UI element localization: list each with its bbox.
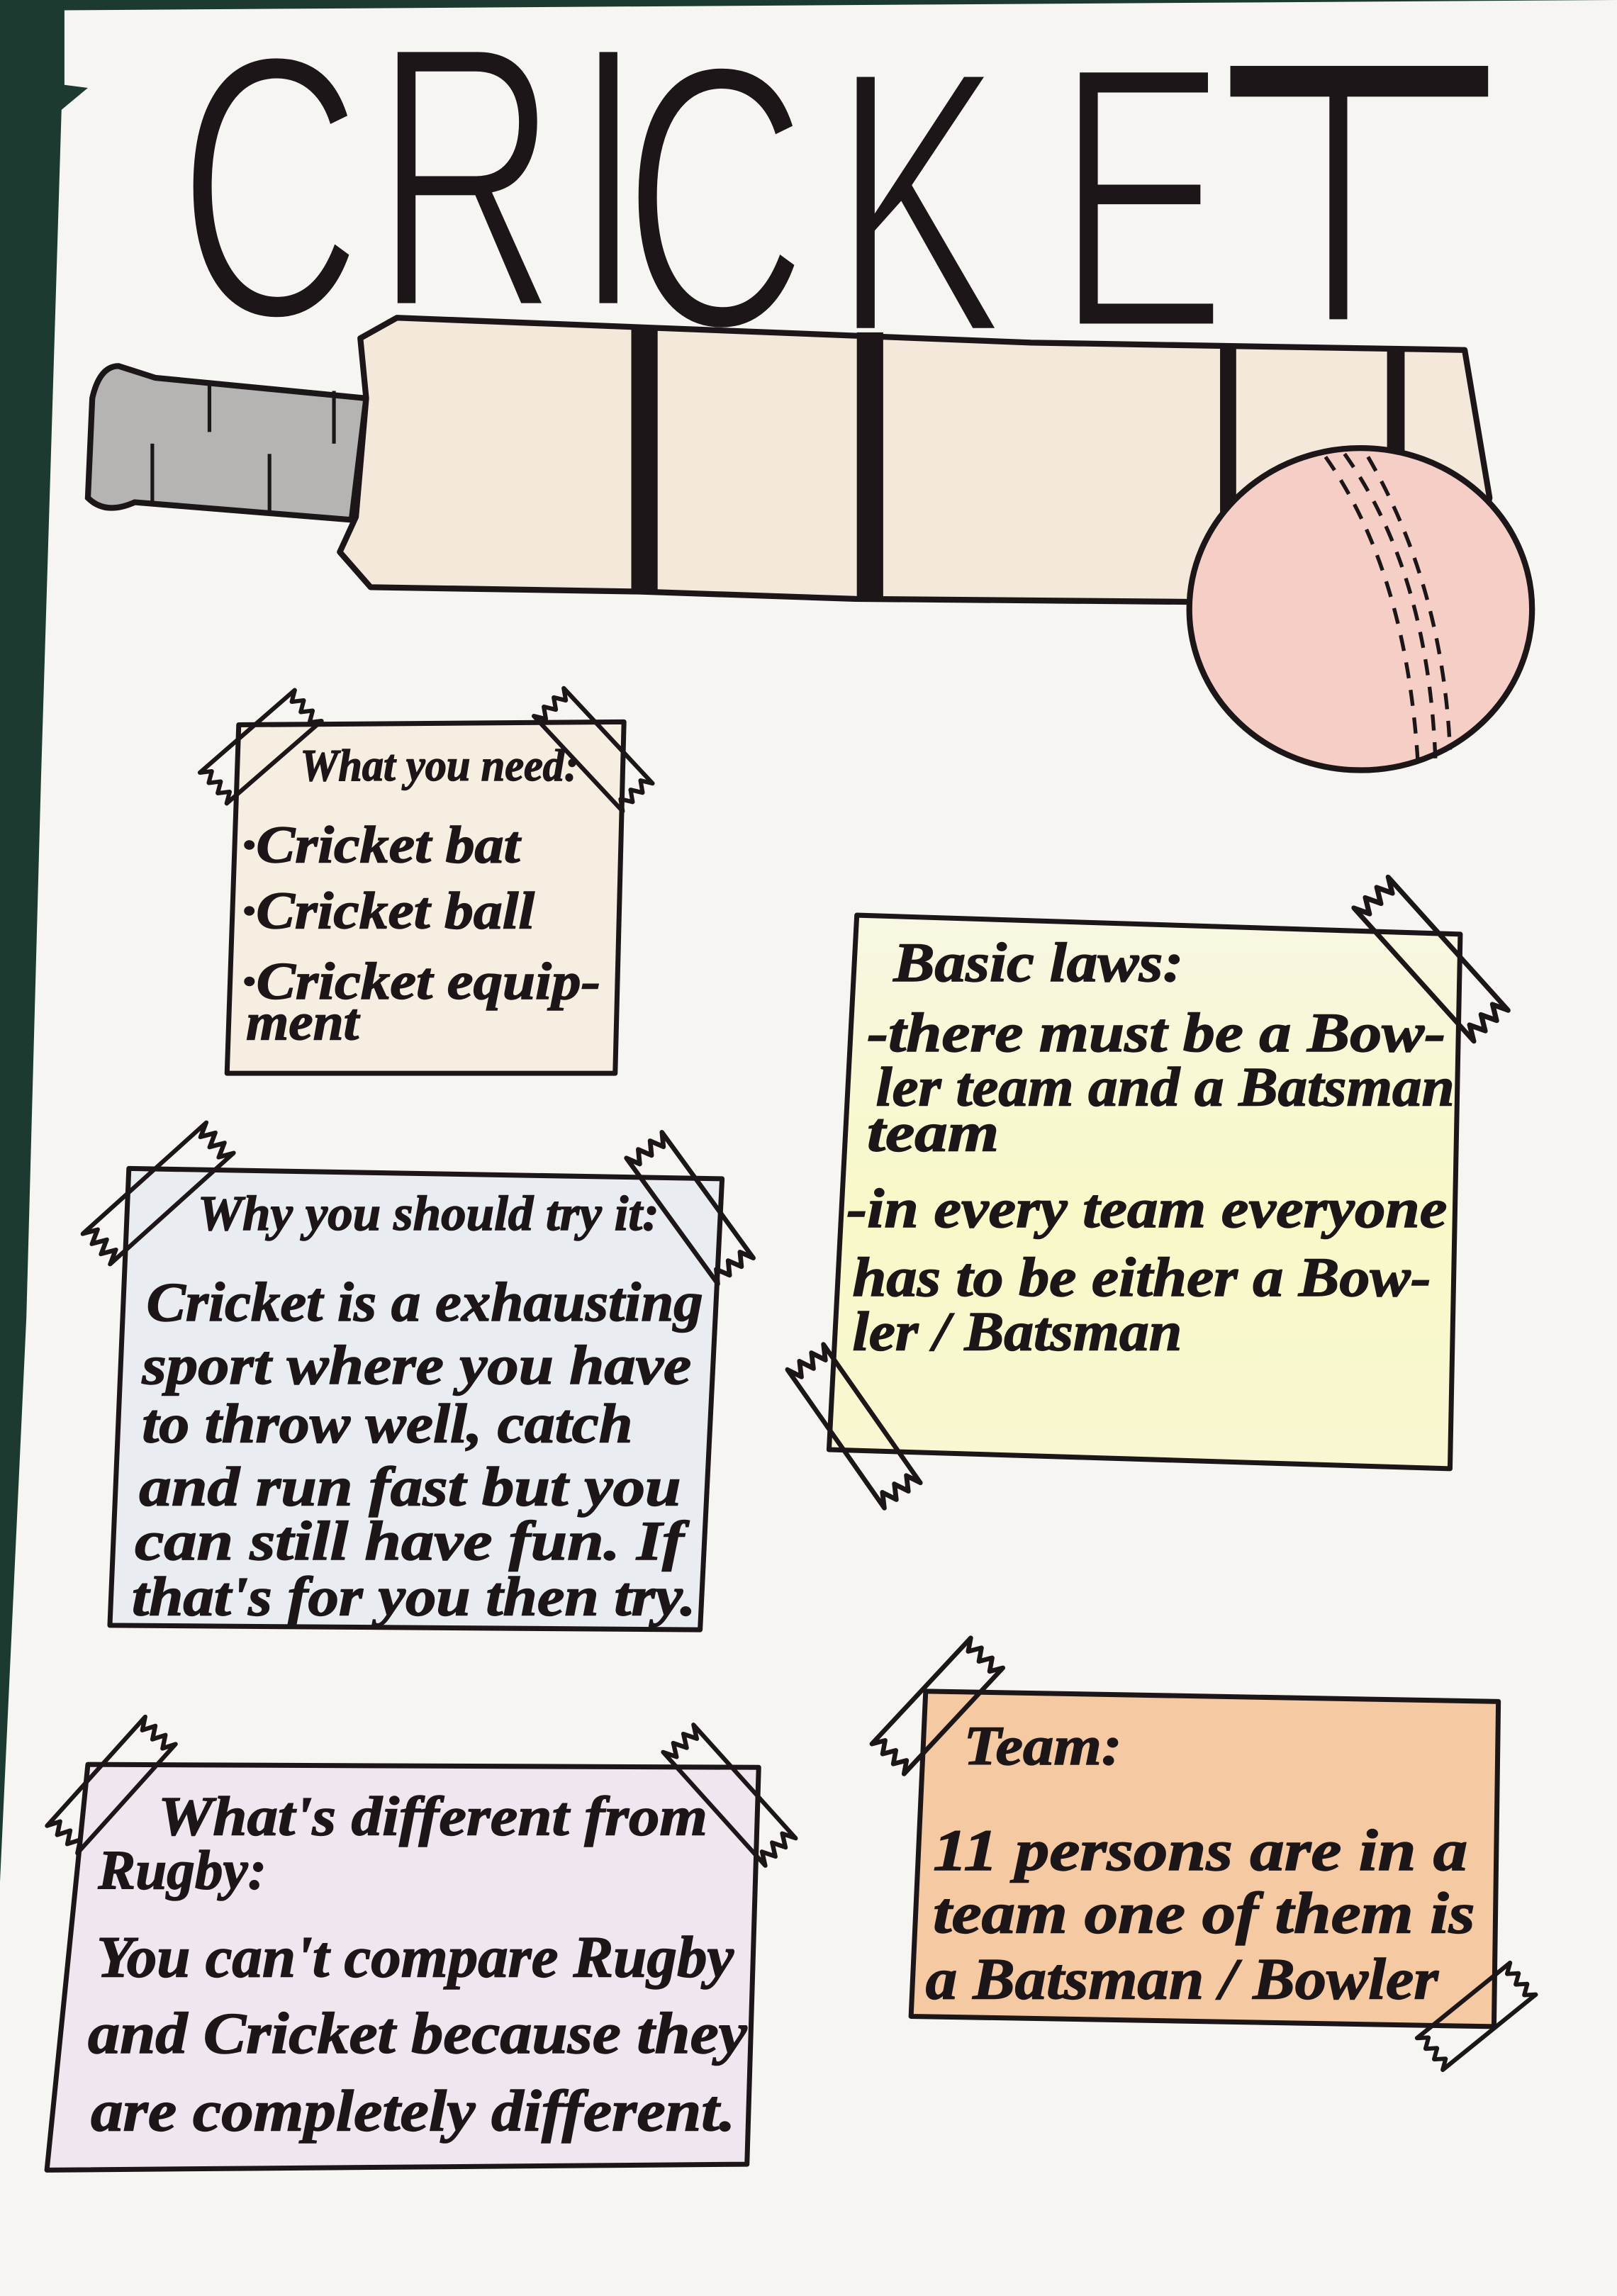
body text: has to be either a Bow-	[852, 1246, 1431, 1308]
body text: ler team and a Batsman	[876, 1056, 1455, 1118]
body text: Cricket is a exhausting	[147, 1271, 703, 1333]
body text	[846, 1002, 1455, 1362]
heading: Team:	[964, 1715, 1122, 1776]
list: ·Cricket equip-	[242, 953, 600, 1011]
tape	[83, 1123, 233, 1264]
tape	[1417, 1963, 1536, 2070]
body text: a Batsman / Bowler	[926, 1947, 1439, 2012]
body text: that's for you then try.	[132, 1565, 695, 1627]
body text: sport where you have	[141, 1334, 691, 1396]
tape	[788, 1345, 920, 1508]
heading	[97, 1785, 707, 1901]
heading: What you need:	[301, 740, 578, 790]
body text: team	[867, 1102, 999, 1163]
body text: ler / Batsman	[852, 1301, 1182, 1362]
body text: 11 persons are in a	[933, 1818, 1467, 1883]
panel: why you should try it	[83, 1123, 754, 1630]
body text: -there must be a Bow-	[867, 1002, 1445, 1063]
body text	[926, 1818, 1475, 2012]
icon: cricket bat	[88, 318, 1489, 602]
list: ·Cricket ball	[242, 883, 535, 941]
bat handle	[88, 366, 367, 520]
panel: different from rugby	[47, 1717, 795, 2170]
list: ment	[246, 994, 361, 1052]
tape	[872, 1638, 1003, 1774]
body text: to throw well, catch	[142, 1393, 633, 1455]
list	[242, 817, 600, 1052]
tape	[627, 1132, 754, 1284]
body text: can still have fun. If	[135, 1510, 690, 1572]
panel: team	[872, 1638, 1536, 2070]
body text: -in every team everyone	[846, 1177, 1447, 1239]
body text: and Cricket because they	[88, 2000, 747, 2066]
tape	[664, 1725, 795, 1866]
bat blade	[340, 318, 1489, 602]
tape	[534, 688, 653, 812]
panel: what you need	[200, 688, 653, 1073]
heading: What's different from	[158, 1785, 707, 1847]
tape	[1354, 878, 1508, 1041]
heading: Basic laws:	[893, 931, 1183, 993]
body text: and run fast but you	[139, 1456, 681, 1518]
list: ·Cricket bat	[242, 817, 522, 875]
heading: Why you should try it:	[198, 1186, 659, 1241]
tape	[200, 690, 322, 804]
body text	[132, 1271, 703, 1627]
icon: cricket ball	[1190, 448, 1532, 771]
body text: team one of them is	[933, 1881, 1475, 1946]
tape	[47, 1717, 176, 1853]
heading: Rugby:	[97, 1839, 267, 1901]
body text: are completely different.	[91, 2078, 735, 2144]
body text: You can't compare Rugby	[96, 1925, 734, 1990]
panel: basic laws	[788, 878, 1508, 1508]
body text	[88, 1925, 747, 2144]
